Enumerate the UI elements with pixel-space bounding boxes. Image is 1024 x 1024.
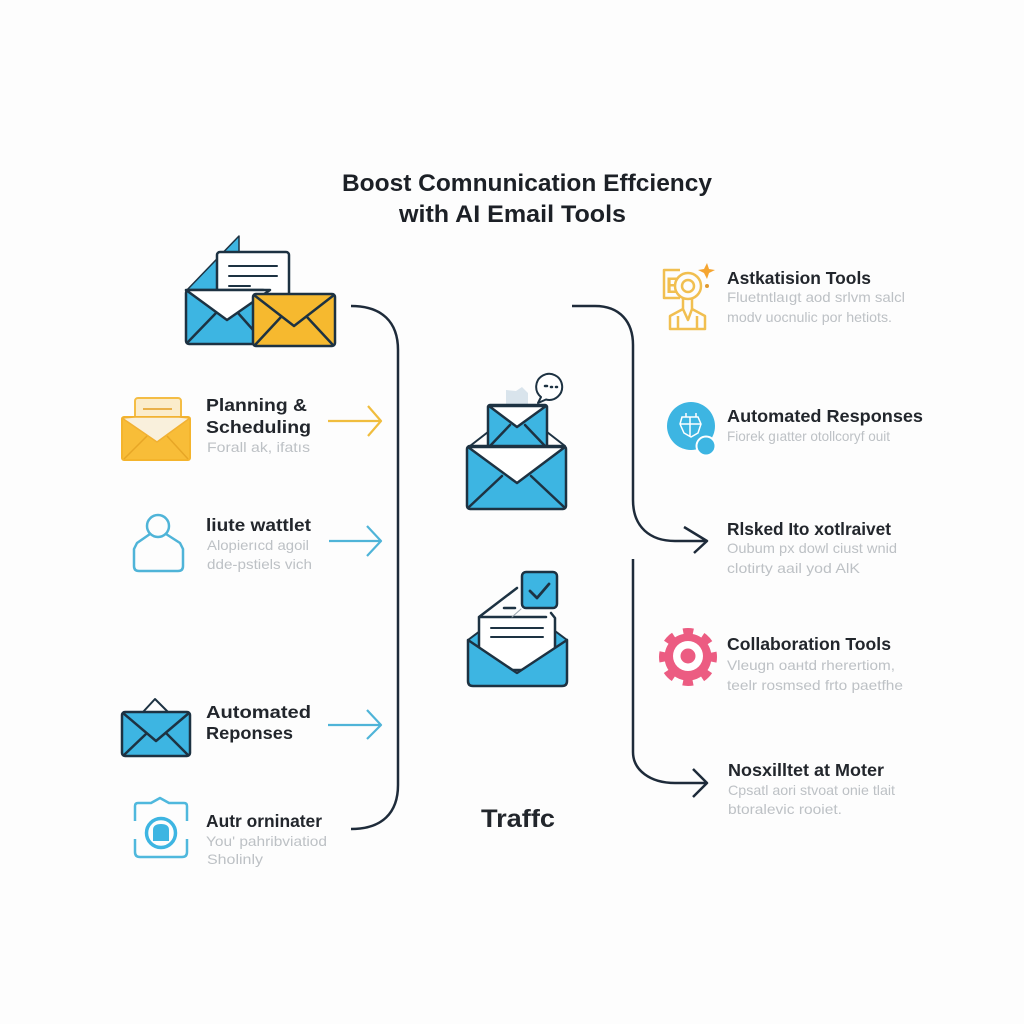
right connector upper with arrow: [572, 306, 707, 553]
center icon: stacked envelopes with speech bubble: [467, 374, 566, 509]
right item: assistant tools: modv uocnulic por hetiots.: [727, 309, 892, 325]
title: [342, 170, 713, 228]
icon: yellow assistant: [664, 263, 715, 329]
description: person: Alopierıcd agoil: [207, 537, 309, 553]
right item: collaboration tools: teelr rosmsed frto paetfhe: [727, 677, 903, 693]
title: Boost Comnunication Effciency: [342, 170, 713, 197]
heading: automated reponses: Automated: [206, 702, 311, 722]
heading: automation: Autr orninater: [206, 811, 322, 831]
left item: person: dde-pstiels vich: [207, 556, 312, 572]
heading: nosxilltet at moter: Nosxilltet at Moter: [728, 760, 884, 780]
icon: person outline: [134, 515, 183, 571]
right item: risked: [727, 519, 897, 576]
right item: collaboration tools: [662, 632, 903, 693]
right item: nosxilltet at moter: [728, 760, 895, 817]
heading: person: liute wattlet: [206, 515, 311, 535]
right item: automated responses: [667, 402, 923, 456]
description: nosxilltet at moter: Cpsatl aori stvoat onie tlait: [728, 782, 895, 798]
heading: automated responses: Automated Responses: [727, 406, 923, 426]
heading: assistant tools: Astkatision Tools: [727, 268, 871, 288]
left item: person: [134, 515, 381, 572]
left item: automated reponses: [122, 699, 381, 756]
description: collaboration tools: Vleugn oaнtd rherertiom,: [727, 657, 895, 673]
icon: pink gear: [662, 632, 714, 682]
icon: overlapping blue and yellow envelopes: [186, 236, 335, 346]
right item: risked: clotirty aail yod AlK: [727, 560, 861, 576]
left item: planning and scheduling: [122, 395, 381, 460]
description: planning: Forall ak, ifatıs: [207, 439, 310, 455]
left item: planning and scheduling: Scheduling: [206, 417, 311, 437]
left item: automation: Sholinly: [207, 851, 263, 867]
arrow: yellow: [328, 406, 381, 436]
description: assistant tools: Fluetntlaıgt aod srlvm salcl: [727, 289, 905, 305]
arrow: blue: [328, 710, 381, 739]
right item: assistant tools: [664, 263, 905, 329]
right connector lower with arrow: [633, 559, 707, 797]
arrow: blue: [329, 526, 381, 556]
icon: camera frame with lock: [135, 798, 187, 857]
icon: blue brain badge: [667, 402, 716, 456]
icon: yellow envelope: [122, 398, 190, 460]
left bracket connector: [351, 306, 398, 829]
title: with AI Email Tools: [398, 201, 626, 228]
description: risked: Oubum px dowl ciust wnid: [727, 540, 897, 556]
description: automated responses: Fiorek gıatter otollcoryf ouit: [727, 428, 890, 444]
heading: planning and scheduling: Planning &: [206, 395, 307, 415]
icon: blue envelope: [122, 699, 190, 756]
heading: risked: Rlsked Ito xotlraivet: [727, 519, 891, 539]
description: automation: You' pahribviatiod: [206, 833, 327, 849]
label: traffic: Traffc: [481, 805, 555, 833]
left item: automated reponses: Reponses: [206, 723, 293, 743]
center icon: open envelope with check badge: [468, 572, 567, 686]
icon: yellow assistant: E: [666, 273, 681, 298]
right item: nosxilltet at moter: btoralevic rooiet.: [728, 801, 842, 817]
left item: automation: [135, 798, 327, 867]
heading: collaboration tools: Collaboration Tools: [727, 634, 891, 654]
